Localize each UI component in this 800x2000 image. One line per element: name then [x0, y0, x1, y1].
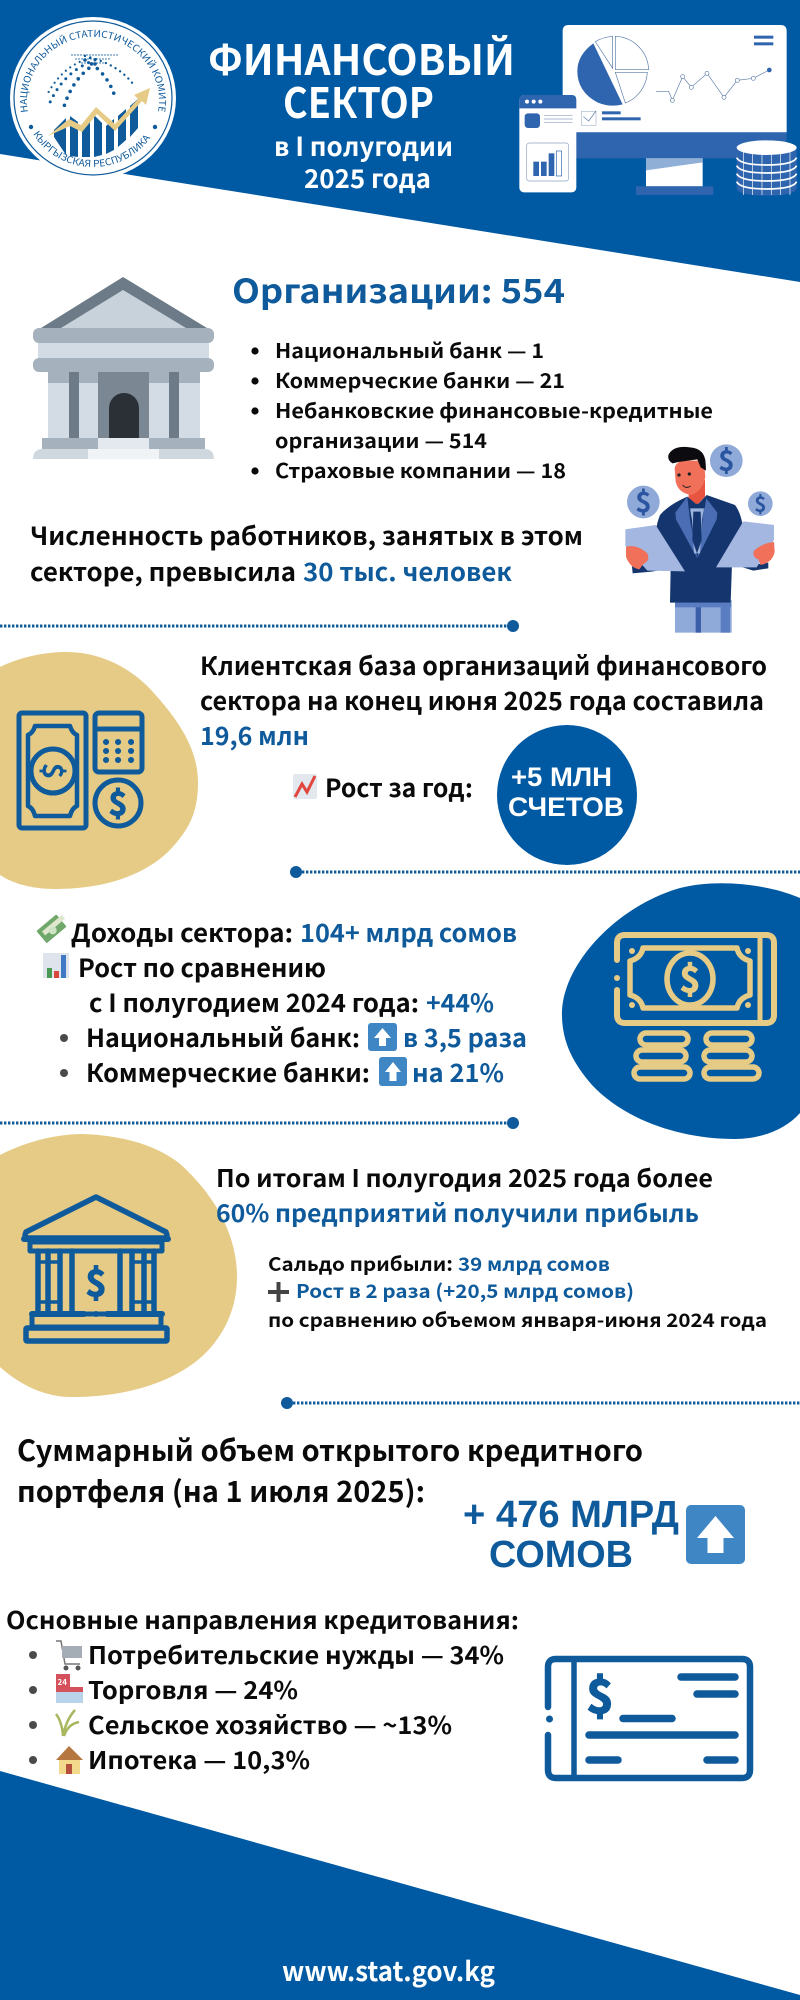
text: client base	[200, 647, 767, 753]
text: sector income	[60, 914, 527, 1090]
text: sector income: Доходы сектора:	[71, 914, 293, 950]
logo: national statistical committee: КЫРГЫЗСКАЯ РЕСПУБЛИКА	[34, 130, 150, 167]
text: sector income: в 3,5 раза	[403, 1019, 527, 1055]
text: profit: Сальдо прибыли:	[268, 1250, 453, 1277]
icon: convenience store emoji	[56, 1674, 83, 1703]
text: profit: по сравнению объемом января-июня 2024 года	[268, 1306, 767, 1333]
text: sector income: Рост по сравнению	[78, 949, 326, 985]
text: profit: 39 млрд сомов	[458, 1250, 610, 1277]
icon: banknote and coins	[614, 935, 774, 1079]
heading: credit portfolio: Суммарный объем открытого кредитного	[17, 1428, 643, 1470]
icon: up arrow national bank	[368, 1023, 397, 1051]
blob: income	[562, 883, 800, 1139]
list: organisation types	[251, 335, 713, 484]
text: sector income: 104+ млрд сомов	[300, 914, 517, 950]
callout: +5 million accounts: СЧЕТОВ	[508, 792, 624, 822]
text: sector income: +44%	[426, 984, 494, 1020]
icon: banknote, calculator and coin	[19, 713, 142, 828]
heading: credit portfolio: портфеля (на 1 июля 2025):	[17, 1469, 425, 1511]
icon: bank building	[33, 277, 214, 459]
callout: 476 billion soms: + 476 МЛРД	[463, 1494, 679, 1536]
icon: rice plant emoji	[56, 1710, 79, 1736]
text: sector income: на 21%	[412, 1054, 504, 1090]
text: profit: Рост в 2 раза (+20,5 млрд сомов)	[296, 1277, 634, 1304]
list: organisation types: Небанковские финансовые-кредитные	[275, 395, 713, 424]
list: lending directions: Сельское хозяйство — ~13%	[88, 1706, 452, 1741]
icon: bar chart emoji	[43, 953, 69, 978]
heading: credit portfolio	[17, 1428, 643, 1511]
illustration: man with documents: $	[754, 487, 766, 517]
text: number of employees	[30, 517, 583, 589]
list: lending directions	[29, 1636, 504, 1776]
footer banner	[0, 1771, 800, 2000]
text: yearly growth: Рост за год:	[325, 769, 473, 805]
heading: organisations: Организации: 554	[232, 265, 565, 313]
icon: growth chart emoji	[293, 774, 317, 799]
text: sector income: с I полугодием 2024 года:	[89, 984, 419, 1020]
blob: profit	[0, 1134, 237, 1397]
text: sector income: Коммерческие банки:	[86, 1054, 370, 1090]
title: 2025 года	[304, 159, 431, 196]
text: client base: Клиентская база организаций финансового	[200, 647, 767, 683]
text: client base: 19,6 млн	[200, 717, 309, 753]
illustration: man with documents: $	[718, 440, 735, 480]
text: number of employees: Численность работников, занятых в этом	[30, 517, 583, 553]
icon: bank with dollar: $	[85, 1255, 107, 1307]
icon: money emoji	[36, 912, 70, 943]
list: lending directions: Потребительские нужды — 34%	[88, 1636, 504, 1671]
icon: banknote and coins: $	[680, 952, 700, 1003]
callout: 476 billion soms: СОМОВ	[489, 1534, 633, 1576]
list: organisation types: организации — 514	[275, 425, 487, 454]
title: СЕКТОР	[283, 70, 434, 131]
list: lending directions: Торговля — 24%	[88, 1671, 298, 1706]
icon: house emoji	[56, 1746, 83, 1774]
logo: national statistical committee	[10, 17, 176, 176]
illustration: man with documents: $	[635, 481, 652, 521]
icon: banknote, calculator and coin: $	[34, 763, 74, 779]
list: lending directions: Ипотека — 10,3%	[88, 1741, 310, 1776]
icon: banknote, calculator and coin: $	[109, 779, 127, 825]
text: client base: сектора на конец июня 2025 года составила	[200, 682, 764, 718]
icon: bank with dollar	[24, 1197, 168, 1341]
text: profit: По итогам I полугодия 2025 года более	[216, 1159, 713, 1194]
icon: up arrow commercial banks	[379, 1057, 407, 1086]
list: organisation types: Страховые компании — 18	[275, 455, 566, 484]
title: ФИНАНСОВЫЙ	[208, 27, 515, 88]
monitor with charts illustration	[519, 25, 797, 196]
text: profit	[216, 1159, 767, 1333]
text: number of employees: секторе, превысила	[30, 553, 296, 589]
callout: +5 million accounts: +5 МЛН	[511, 762, 612, 792]
icon: shopping cart emoji	[56, 1641, 82, 1670]
title: в I полугодии	[274, 127, 453, 164]
blob: client base	[0, 652, 198, 889]
icon: up arrow large	[686, 1505, 745, 1564]
icon: cheque: $	[586, 1661, 614, 1727]
list: organisation types: Коммерческие банки — 21	[275, 365, 565, 394]
callout: 476 billion soms	[463, 1494, 679, 1576]
text: profit: 60% предприятий получили прибыль	[216, 1194, 699, 1229]
icon: convenience store emoji: 24	[58, 1677, 67, 1688]
illustration: man with documents	[625, 440, 775, 633]
text: number of employees: 30 тыс. человек	[303, 553, 512, 589]
text: sector income: Национальный банк:	[86, 1019, 360, 1055]
callout: +5 million accounts	[497, 725, 637, 865]
footer website: www.stat.gov.kg	[282, 1950, 495, 1989]
heading: lending directions: Основные направления кредитования:	[6, 1601, 519, 1636]
title	[208, 27, 515, 196]
header banner	[0, 0, 800, 282]
icon: cheque	[546, 1659, 750, 1778]
list: organisation types: Национальный банк — 1	[275, 335, 544, 364]
